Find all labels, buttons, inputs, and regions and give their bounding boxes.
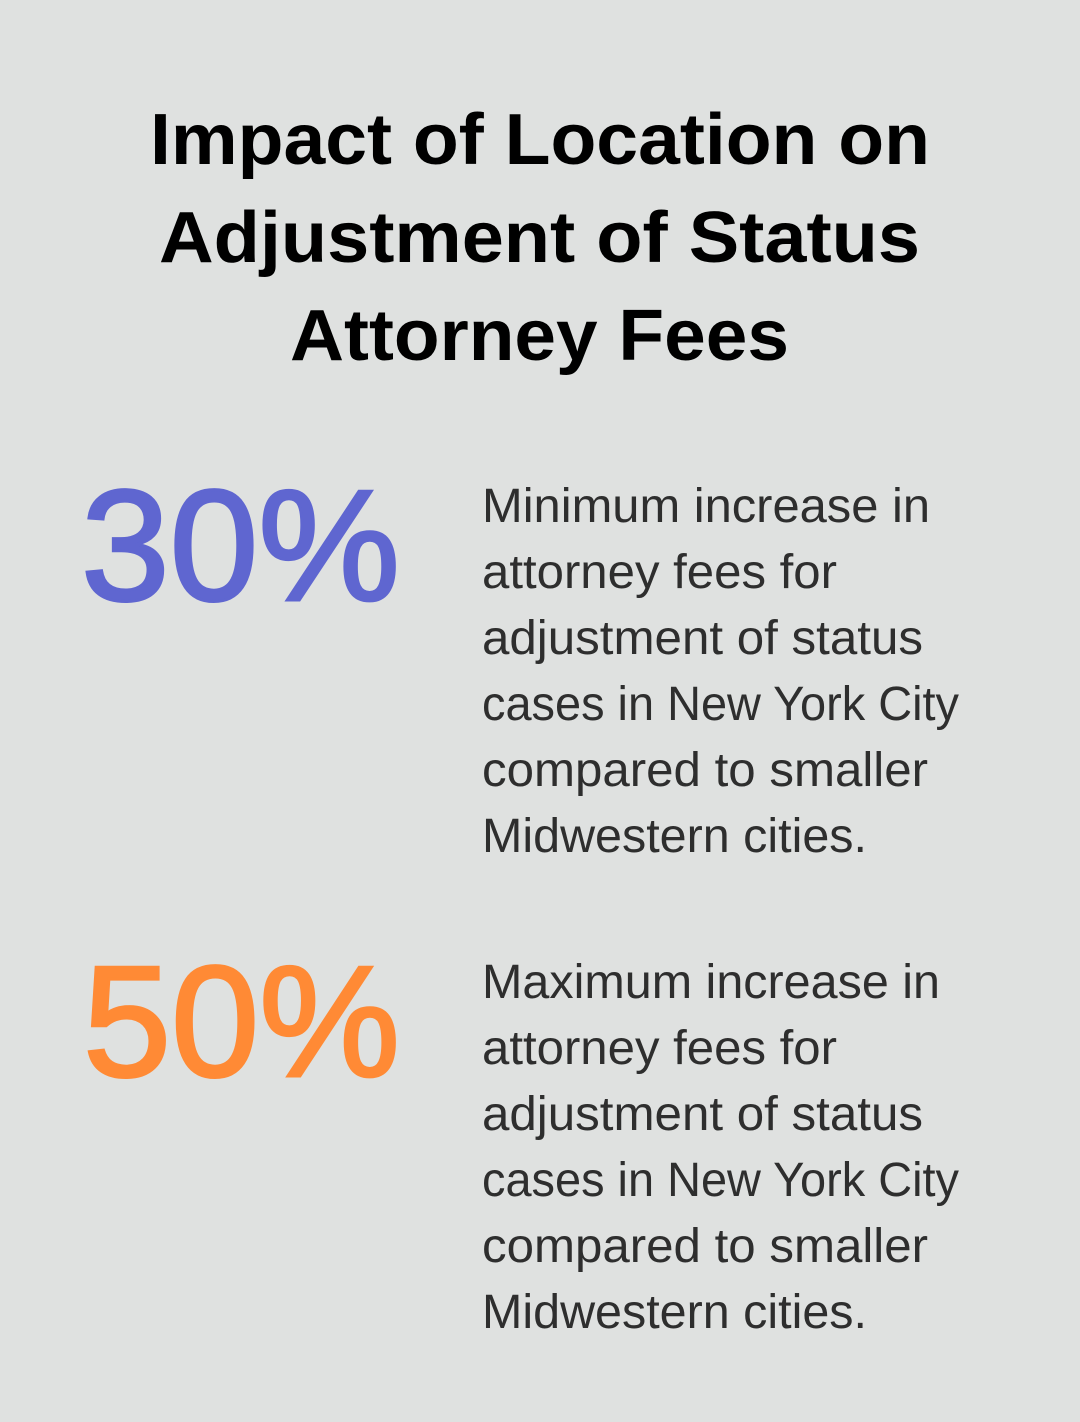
text block: 50% description: cases in New York City bbox=[482, 1154, 959, 1207]
text block: 50% description: adjustment of status bbox=[482, 1088, 923, 1141]
stat: 30%: 30% bbox=[81, 458, 400, 634]
text block: 30% description: compared to smaller bbox=[482, 744, 928, 797]
text block: 30% description: cases in New York City bbox=[482, 678, 959, 731]
title bbox=[150, 100, 930, 376]
text block: 30% description: attorney fees for bbox=[482, 546, 837, 599]
title: Impact of Location on bbox=[150, 100, 930, 180]
title: Adjustment of Status bbox=[159, 198, 920, 278]
text block: 50% description: Maximum increase in bbox=[482, 956, 940, 1009]
text block: 50% description bbox=[482, 956, 959, 1339]
title: Attorney Fees bbox=[290, 296, 789, 376]
text block: 30% description: Midwestern cities. bbox=[482, 810, 867, 863]
text block: 30% description: adjustment of status bbox=[482, 612, 923, 665]
text block: 50% description: compared to smaller bbox=[482, 1220, 928, 1273]
text block: 50% description: Midwestern cities. bbox=[482, 1286, 867, 1339]
text block: 50% description: attorney fees for bbox=[482, 1022, 837, 1075]
stat: 50%: 50% bbox=[83, 934, 400, 1110]
text block: 30% description bbox=[482, 480, 959, 863]
text block: 30% description: Minimum increase in bbox=[482, 480, 930, 533]
